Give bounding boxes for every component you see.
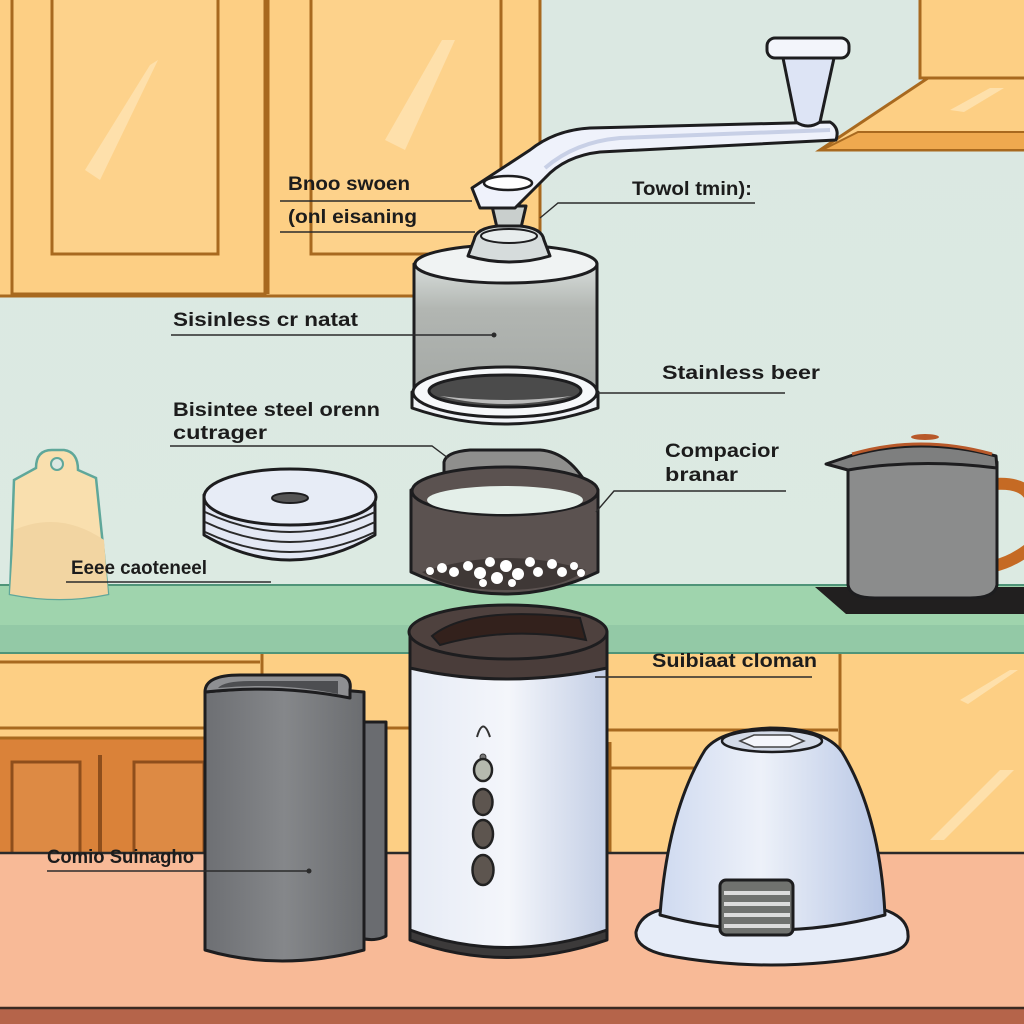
- label: Suibiaat cloman: Suibiaat cloman: [652, 651, 817, 672]
- grey sleeve left: [205, 675, 386, 961]
- label: Compacior branar: [596, 441, 786, 512]
- grinder body: [409, 605, 607, 958]
- cylinder cutter disc: [204, 469, 376, 560]
- label: Bisintee steel orenn cutrager: cutrager: [173, 423, 268, 444]
- label: Sisinless cr natat: Sisinless cr natat: [173, 310, 359, 331]
- label: Bnoo swoen: Bnoo swoen: [288, 174, 410, 195]
- chamber lid flap: [444, 450, 590, 490]
- canister bag left: [10, 450, 108, 599]
- vent: [720, 880, 793, 935]
- crank handle: [472, 38, 849, 208]
- label: Sisinless cr natat: [171, 310, 496, 338]
- dome base right: [636, 728, 908, 965]
- beans: [426, 557, 585, 587]
- burner plate right: [815, 587, 1024, 614]
- spindle and nut: [468, 206, 550, 262]
- upper kitchen cabinets: [0, 0, 540, 296]
- label: Eeee caoteneel: Eeee caoteneel: [71, 558, 207, 579]
- label: Bisintee steel orenn cutrager: [170, 400, 448, 458]
- counter top: [0, 585, 1024, 653]
- bean chamber: [411, 467, 598, 594]
- floor surface: [0, 853, 1024, 1024]
- label: Towol tmin: [540, 179, 755, 218]
- label: Stainless beer: Stainless beer: [662, 363, 821, 384]
- range hood top right: [820, 0, 1024, 150]
- label: Comio Suinagho: [47, 847, 312, 874]
- label: (onl eisaning: (onl eisaning: [288, 207, 417, 228]
- hopper: stainless container: [412, 245, 598, 424]
- label: Comio Suinagho: Comio Suinagho: [47, 847, 194, 868]
- label: Compacior branar: branar: [665, 465, 739, 486]
- label: Bisintee steel orenn cutrager: Bisintee steel orenn: [173, 400, 380, 421]
- kettle right: [826, 434, 1024, 598]
- label: Compacior branar: Compacior: [665, 441, 780, 462]
- lower cabinets: [0, 654, 1024, 854]
- control buttons: [472, 726, 494, 885]
- label: Towol tmin: Towol tmin):: [632, 179, 752, 200]
